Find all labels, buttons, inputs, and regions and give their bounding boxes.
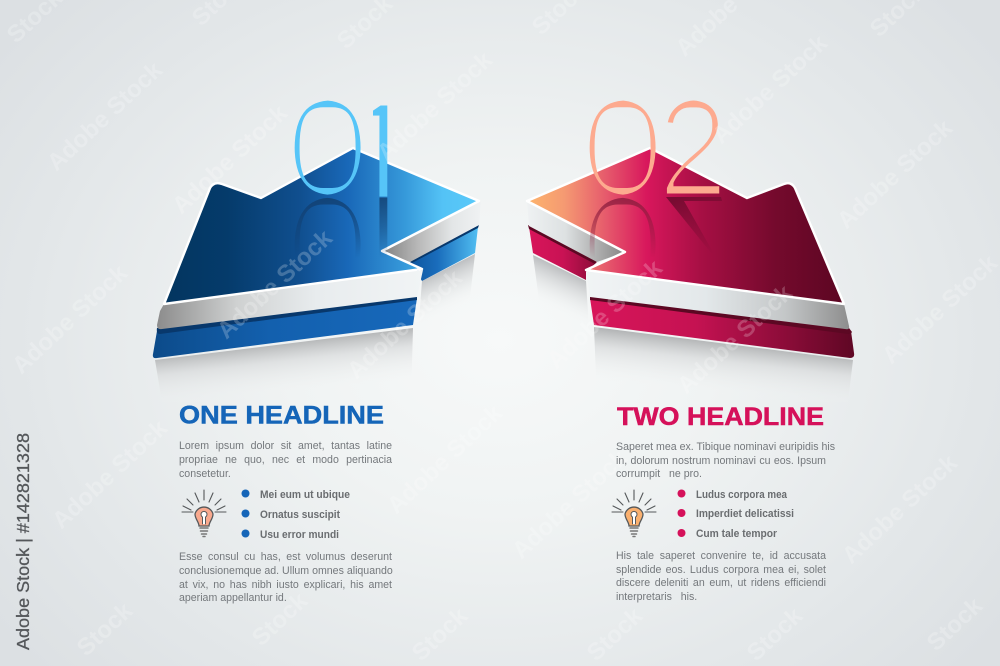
paragraph one bottom: conclusionemque ad. Ullum omnes aliquando bbox=[179, 565, 393, 577]
lower side front bbox=[590, 298, 854, 358]
paragraph two bottom: splendide eos. Ludus corpora mea ei, solet bbox=[616, 564, 826, 576]
top face bbox=[527, 148, 844, 304]
number 02: 0 bbox=[579, 71, 666, 225]
paragraph one top: consetetur. bbox=[179, 468, 231, 480]
paragraph two bottom: discere deleniti an eum, ut ridens efficiendi bbox=[616, 577, 826, 589]
paragraph two bottom: interpretaris his. bbox=[616, 591, 697, 603]
headline two: TWO HEADLINE bbox=[617, 403, 824, 431]
bullet labels right bbox=[696, 489, 794, 540]
bullet labels left: Mei eum ut ubique bbox=[260, 489, 350, 501]
watermark: Adobe Stock bbox=[672, 279, 798, 399]
bullet labels right: Imperdiet delicatissi bbox=[696, 508, 794, 520]
paragraph two bottom bbox=[616, 550, 826, 603]
number 01: 1 bbox=[337, 70, 424, 243]
bullet labels left: Usu error mundi bbox=[260, 529, 339, 541]
watermark: Adobe Stock bbox=[837, 449, 963, 569]
watermark: Adobe Stock bbox=[212, 224, 338, 344]
top face bbox=[164, 148, 479, 304]
icon: light bulb right bbox=[612, 490, 656, 536]
watermark: Adobe Stock bbox=[47, 414, 173, 534]
paragraph one bottom: aperiam appellantur id. bbox=[179, 592, 287, 604]
white band left bbox=[527, 201, 625, 262]
icon: light bulb left bbox=[182, 490, 226, 536]
watermark: Adobe Stock bbox=[167, 99, 293, 219]
watermark: Adobe Stock bbox=[7, 259, 133, 379]
watermark: Adobe Stock bbox=[42, 56, 168, 176]
reflection: arrow 01 bbox=[155, 254, 475, 402]
reflection of number 01: 1 bbox=[337, 151, 424, 324]
watermark: Stock bbox=[247, 587, 313, 652]
reflection of number 02: 0 bbox=[579, 168, 666, 322]
bullet labels left bbox=[260, 489, 350, 541]
paragraph one top: Lorem ipsum dolor sit amet, tantas latine bbox=[179, 440, 392, 452]
watermark: Stock bbox=[72, 597, 138, 662]
paragraph two top bbox=[616, 441, 835, 480]
paragraph one bottom: at vix, no has nibh iusto explicari, his amet bbox=[179, 579, 392, 591]
paragraph one top: propriae ne quo, nec et modo pertinacia bbox=[179, 454, 392, 466]
arrow 01 bbox=[153, 148, 481, 358]
lower side left bbox=[529, 227, 597, 280]
bullet labels right: Cum tale tempor bbox=[696, 528, 778, 540]
dark seam bbox=[157, 225, 479, 334]
watermark: Stock bbox=[407, 602, 473, 666]
dark seam bbox=[528, 225, 852, 334]
watermark: Stock bbox=[742, 602, 808, 666]
watermark: Adobe Stock bbox=[382, 399, 508, 519]
white band front bbox=[157, 270, 423, 329]
watermark: Adobe Stock bbox=[342, 264, 468, 384]
paragraph one bottom bbox=[179, 551, 393, 604]
paragraph two bottom: His tale saperet convenire te, id accusata bbox=[616, 550, 826, 562]
headline one: ONE HEADLINE bbox=[179, 402, 384, 430]
paragraph one bottom: Esse consul cu has, est volumus deserunt bbox=[179, 551, 392, 563]
number 02 bbox=[579, 71, 729, 225]
paragraph one top bbox=[179, 440, 392, 480]
watermark: Adobe Stock bbox=[832, 114, 958, 234]
watermark: Adobe Stock bbox=[507, 444, 633, 564]
paragraph two top: corrumpit ne pro. bbox=[616, 468, 702, 480]
bullets left bbox=[242, 490, 250, 538]
paragraph two top: Saperet mea ex. Tibique nominavi euripidis his bbox=[616, 441, 835, 453]
stock id label: Adobe Stock | #142821328 bbox=[13, 433, 33, 650]
reflection of number 01: 0 bbox=[284, 168, 371, 322]
bullet labels right: Ludus corpora mea bbox=[696, 489, 788, 501]
bullet labels left: Ornatus suscipit bbox=[260, 509, 340, 521]
number 02: 2 bbox=[658, 72, 729, 225]
watermark: Stock bbox=[582, 602, 648, 666]
watermark: Adobe Stock bbox=[707, 29, 833, 149]
arrow 02 bbox=[527, 148, 854, 358]
number 01 bbox=[294, 100, 388, 196]
bullets right bbox=[678, 490, 686, 537]
lower side right bbox=[410, 227, 478, 281]
number 01: 0 bbox=[284, 71, 371, 225]
watermark: Adobe Stock bbox=[877, 249, 1000, 369]
lower side front bbox=[153, 298, 417, 358]
reflection of number 02 bbox=[590, 197, 722, 254]
reflection: arrow 02 bbox=[533, 255, 853, 402]
watermark: Stock bbox=[922, 592, 988, 657]
reflection of number 01 bbox=[295, 198, 388, 254]
watermark: Adobe Stock bbox=[542, 254, 668, 374]
watermark: Adobe Stock bbox=[372, 46, 498, 166]
white band front bbox=[586, 270, 849, 329]
white band right bbox=[382, 201, 481, 262]
paragraph two top: in, dolorum nostrum nominavi cu eos. Ipsum bbox=[616, 455, 826, 467]
